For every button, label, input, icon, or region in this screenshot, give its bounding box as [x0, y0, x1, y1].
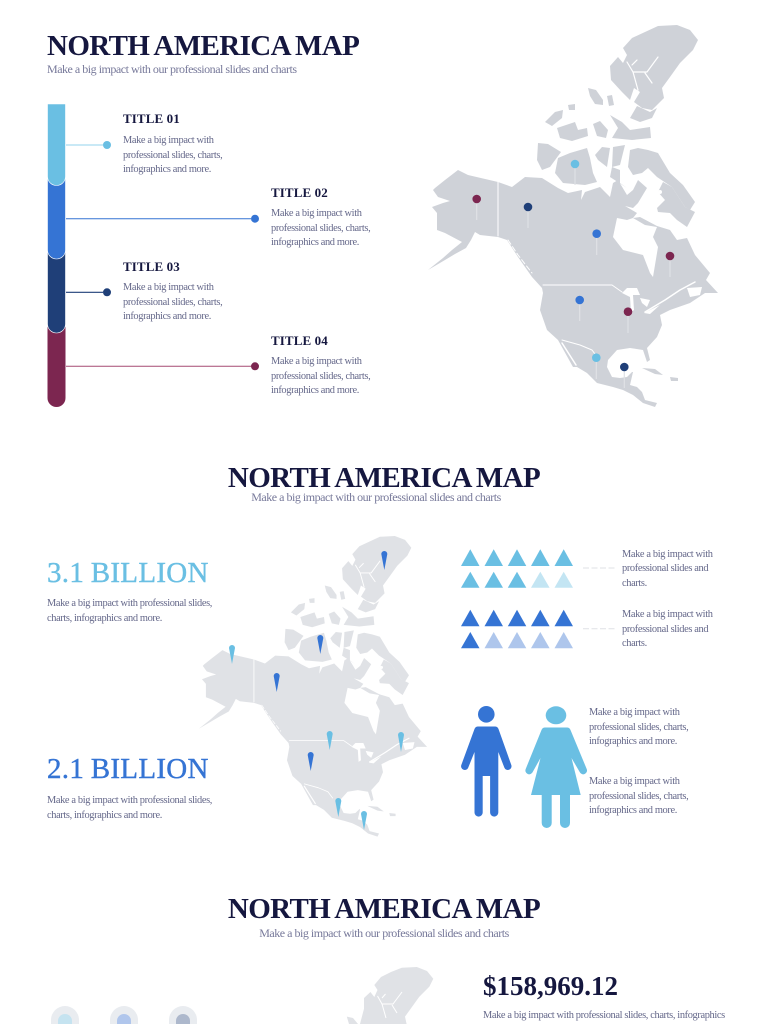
stat 3 text: Make a big impact with professional slides, charts, infographics: [483, 1010, 725, 1021]
stat: 3.1 billion: 3.1 BILLION: [47, 557, 209, 589]
stat: dollar value: $158,969.12: [483, 971, 618, 1001]
map 3: north america, cropped by page bottom: [347, 967, 433, 1024]
icon row: cropped pins: [51, 1006, 197, 1024]
item 04 text: infographics and more.: [271, 385, 359, 396]
subtitle 1: Make a big impact with our professional slides and charts: [47, 62, 297, 76]
item 01: [123, 111, 222, 175]
item 02 title: TITLE 02: [271, 185, 328, 200]
pin heads: [472, 160, 674, 371]
item 01 text: infographics and more.: [123, 164, 211, 175]
triangle caption 2: professional slides and: [622, 624, 708, 635]
stat 2 text: [47, 795, 212, 821]
item 02: [271, 185, 370, 248]
stat 2 text: charts, infographics and more.: [47, 810, 162, 821]
item 03 text: professional slides, charts,: [123, 297, 222, 308]
pin stems: [477, 164, 670, 388]
item 03 text: Make a big impact with: [123, 282, 214, 293]
item 03 text: [123, 282, 222, 322]
stat 1 text: [47, 598, 212, 624]
triangle pictogram: light blue: [461, 549, 573, 588]
item 04 text: professional slides, charts,: [271, 371, 370, 382]
stat 1 text: Make a big impact with professional slides,: [47, 598, 212, 609]
man caption: professional slides, charts,: [589, 722, 688, 733]
man caption: Make a big impact with: [589, 707, 680, 718]
subtitle 2: Make a big impact with our professional slides and charts: [251, 490, 501, 504]
triangle caption 1: Make a big impact with: [622, 548, 713, 560]
man caption: [589, 707, 688, 747]
item 04 text: Make a big impact with: [271, 356, 362, 367]
triangle caption 2: Make a big impact with: [622, 609, 713, 620]
triangle caption 2: [622, 609, 713, 649]
segment: maroon: [48, 320, 66, 407]
segment: light blue: [48, 104, 66, 186]
title 2: NORTH AMERICA MAP: [228, 462, 540, 494]
item 02 text: Make a big impact with: [271, 208, 362, 219]
item 02 text: infographics and more.: [271, 237, 359, 248]
connector 4: [66, 362, 259, 370]
triangle caption 1: charts.: [622, 578, 647, 589]
title 1: NORTH AMERICA MAP: [47, 30, 359, 62]
icon: man: [461, 706, 512, 817]
stat: 2.1 billion: 2.1 BILLION: [47, 753, 209, 785]
triangle caption 1: professional slides and: [622, 563, 708, 574]
woman caption: Make a big impact with: [589, 776, 680, 787]
item 03 text: infographics and more.: [123, 311, 211, 322]
triangle caption 1: [622, 548, 713, 589]
title 3: NORTH AMERICA MAP: [228, 892, 540, 924]
item 01 text: Make a big impact with: [123, 135, 214, 146]
map 1: north america with pins: [428, 25, 718, 407]
item 02 text: [271, 208, 370, 248]
segment: navy: [48, 250, 66, 333]
item 03: [123, 259, 222, 322]
item 01 text: professional slides, charts,: [123, 150, 222, 161]
item 04 title: TITLE 04: [271, 333, 328, 348]
dashed leaders: [583, 568, 616, 629]
stat 1 text: charts, infographics and more.: [47, 613, 162, 624]
connector 3: [66, 288, 111, 296]
item 02 text: professional slides, charts,: [271, 223, 370, 234]
teardrop pins: [229, 551, 404, 830]
subtitle 3: Make a big impact with our professional slides and charts: [259, 926, 509, 940]
woman caption: professional slides, charts,: [589, 791, 688, 802]
item 03 title: TITLE 03: [123, 259, 180, 274]
timeline bar: [48, 104, 66, 407]
segment: blue: [48, 176, 66, 259]
connector 1: [66, 141, 111, 149]
stat 2 text: Make a big impact with professional slides,: [47, 795, 212, 806]
woman caption: [589, 776, 688, 816]
item 04 text: [271, 356, 370, 396]
triangle caption 2: charts.: [622, 638, 647, 649]
map 2: north america with teardrop pins: [199, 536, 427, 837]
item 01 title: TITLE 01: [123, 111, 180, 126]
man caption: infographics and more.: [589, 736, 677, 747]
triangle pictogram: blue: [461, 610, 573, 648]
connector 2: [66, 215, 259, 223]
woman caption: infographics and more.: [589, 805, 677, 816]
item 01 text: [123, 135, 222, 175]
item 04: [271, 333, 370, 396]
icon: woman: [525, 706, 587, 828]
